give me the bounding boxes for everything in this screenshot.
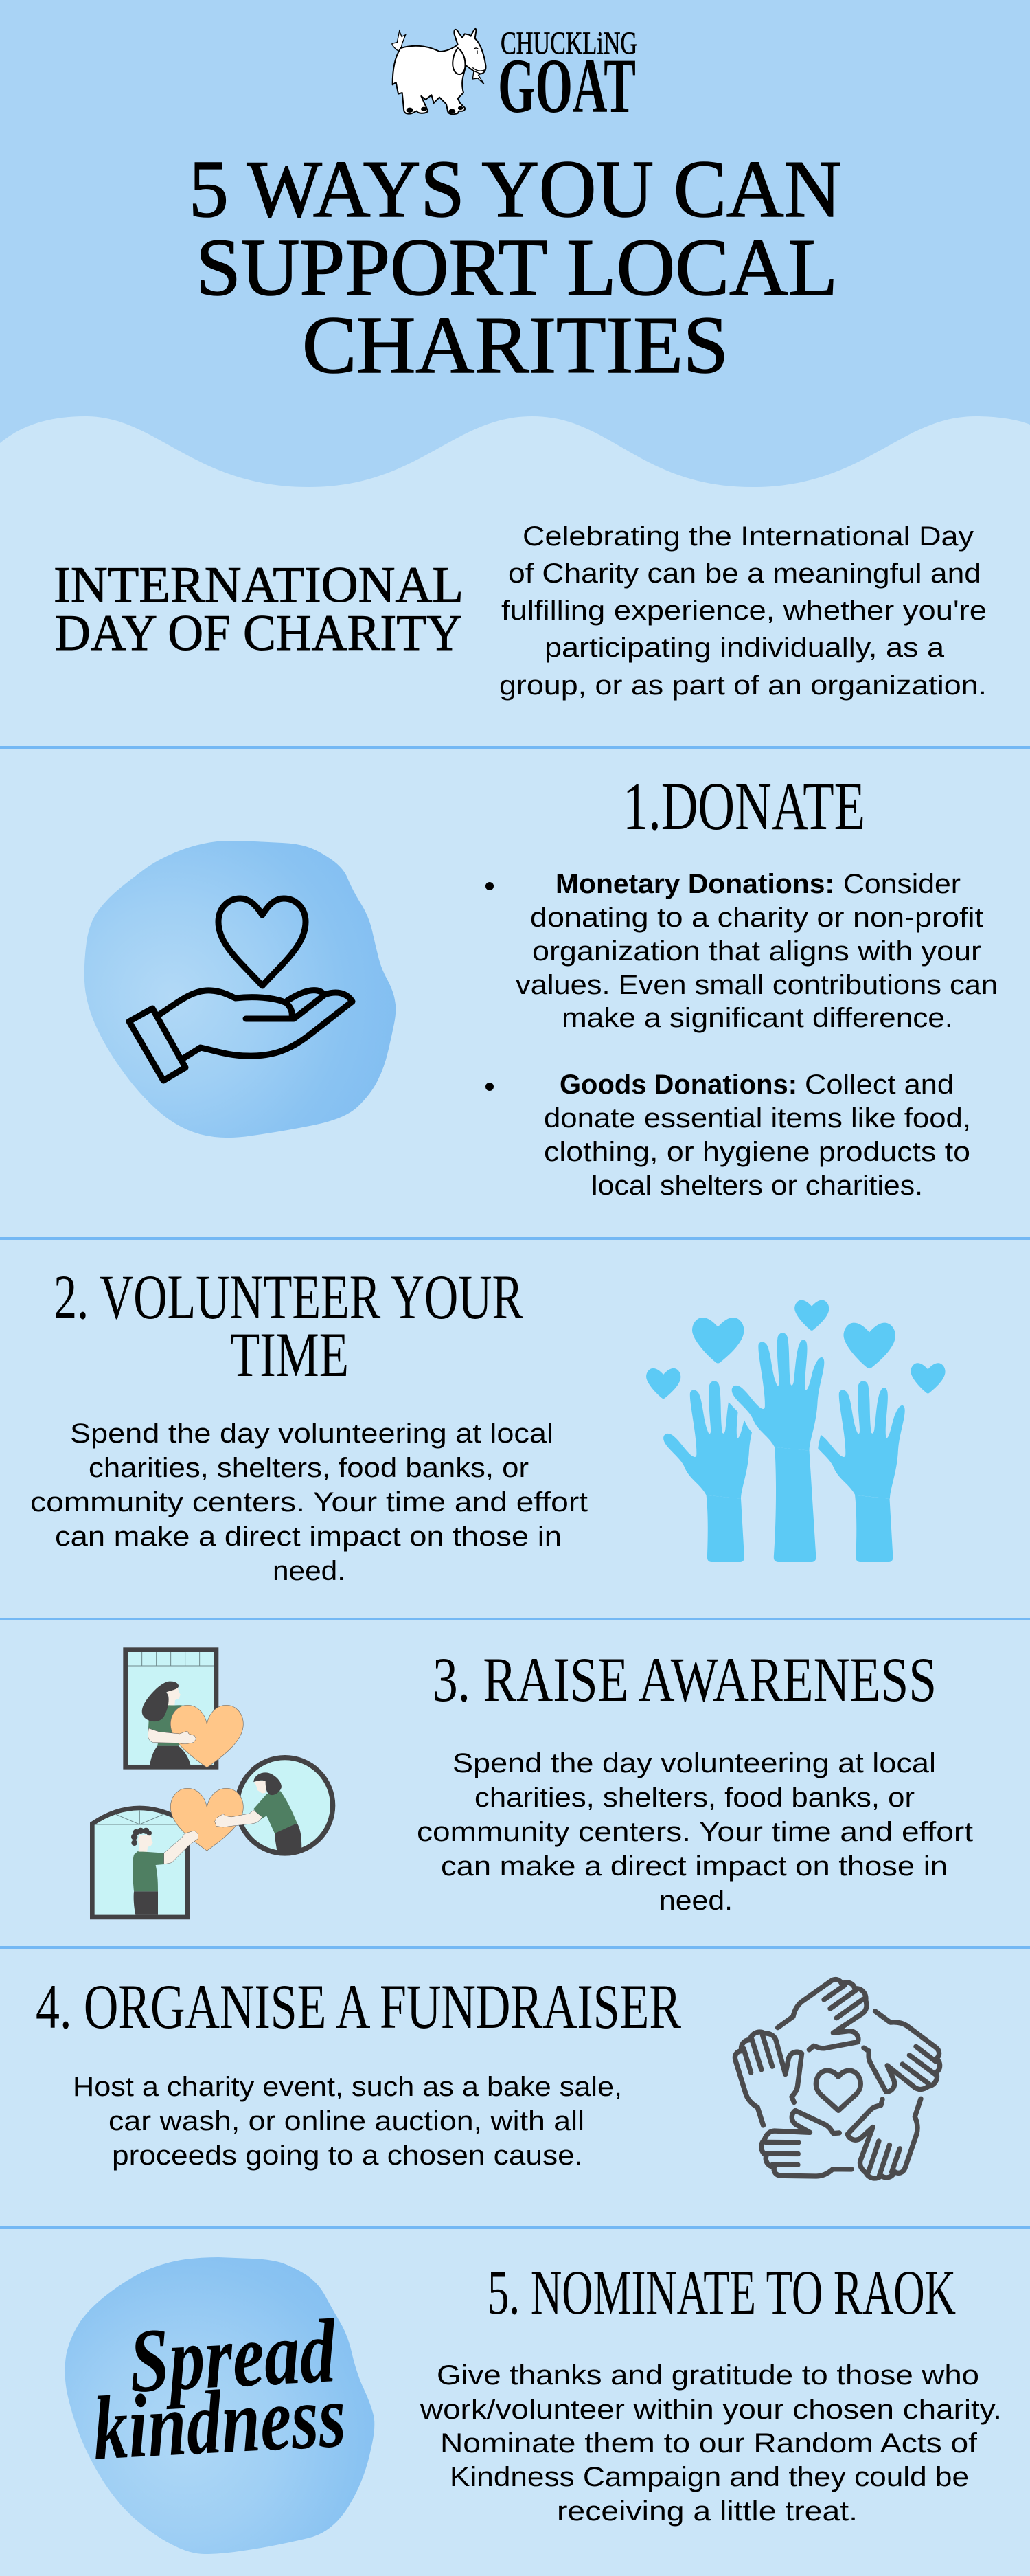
logo wordmark — [498, 25, 637, 129]
icon: circle of hands with heart — [718, 1980, 949, 2208]
goods donations text: clothing, or hygiene products to — [544, 1137, 970, 1167]
arm of woman — [215, 1810, 262, 1827]
body text: Give thanks and gratitude to those who — [437, 2360, 979, 2391]
panel: 4. Organise a fundraiser — [36, 1971, 949, 2208]
icon: raised hands with hearts — [646, 1300, 946, 1562]
body text: community centers. Your time and effort — [30, 1487, 588, 1517]
monetary donations text: donating to a charity or non-profit — [530, 903, 983, 933]
lettering: Spread kindness — [87, 2300, 348, 2479]
intro text: Celebrating the International Day — [523, 521, 974, 552]
logo: Chuckling Goat — [392, 25, 637, 129]
title: 5 WAYS YOU CAN — [189, 144, 841, 234]
monetary donations text: values. Even small contributions can — [516, 970, 998, 1000]
title — [189, 144, 841, 390]
body text: community centers. Your time and effort — [417, 1817, 973, 1847]
arched window with man — [92, 1808, 187, 1917]
intro text: fulfilling experience, whether you're — [501, 596, 987, 626]
lettering: Spread kindness: kindness — [91, 2365, 348, 2479]
panel: 3. Raise awareness — [92, 1645, 973, 1917]
bullet dot — [485, 1083, 494, 1091]
heading: 2. VOLUNTEER YOUR — [54, 1262, 523, 1332]
intro text: group, or as part of an organization. — [499, 670, 987, 701]
panel: 1. Donate — [84, 768, 998, 1201]
logo wordmark: GOAT — [498, 43, 636, 129]
body text: Spend the day volunteering at local — [453, 1748, 936, 1778]
title: CHARITIES — [302, 300, 729, 390]
round window with woman — [237, 1758, 333, 1853]
heading — [54, 557, 464, 662]
intro text: participating individually, as a — [545, 633, 945, 663]
goods donations text: donate essential items like food, — [544, 1103, 971, 1133]
monetary donations text: Consider — [843, 869, 961, 899]
body text — [30, 1419, 588, 1586]
icon: hand holding heart — [129, 899, 352, 1081]
body text — [420, 2360, 1002, 2527]
goods donations text: Collect and — [805, 1070, 954, 1100]
body text: charities, shelters, food banks, or — [474, 1783, 915, 1813]
watercolor blob — [65, 2257, 374, 2554]
heading: 4. ORGANISE A FUNDRAISER — [36, 1971, 681, 2042]
body text: can make a direct impact on those in — [55, 1522, 562, 1552]
body text — [73, 2072, 622, 2171]
logo wordmark: CHUCKLiNG — [501, 25, 637, 61]
body text: Kindness Campaign and they could be — [450, 2462, 969, 2492]
body text: car wash, or online auction, with all — [108, 2106, 584, 2136]
body text: can make a direct impact on those in — [441, 1851, 948, 1882]
heading: DAY OF CHARITY — [55, 605, 462, 662]
monetary donations text — [516, 869, 998, 1033]
watercolor blob — [84, 841, 396, 1138]
heading: INTERNATIONAL — [54, 557, 464, 613]
body text: proceeds going to a chosen cause. — [112, 2140, 583, 2171]
window with woman — [126, 1650, 216, 1767]
monetary donations text: organization that aligns with your — [532, 936, 981, 967]
icon: goat — [392, 29, 485, 114]
bullet dot — [485, 882, 494, 890]
goods donations text: Goods Donations: — [560, 1070, 797, 1100]
panel: 5. Nominate to RAOK — [65, 2257, 1002, 2554]
body text: charities, shelters, food banks, or — [89, 1453, 529, 1483]
title: SUPPORT LOCAL — [196, 222, 838, 313]
heart two — [170, 1788, 243, 1851]
intro text: of Charity can be a meaningful and — [508, 558, 981, 589]
heading — [54, 1262, 523, 1390]
body text: need. — [273, 1556, 345, 1586]
body text: need. — [659, 1886, 733, 1916]
body text — [417, 1748, 973, 1916]
heading: 1.DONATE — [623, 768, 865, 844]
illustration: people sharing hearts through windows — [92, 1650, 333, 1917]
body text: receiving a little treat. — [557, 2496, 858, 2527]
goods donations text: local shelters or charities. — [591, 1171, 923, 1201]
panel: International Day of Charity — [54, 521, 987, 701]
goods donations text — [544, 1070, 971, 1201]
monetary donations text: make a significant difference. — [562, 1003, 953, 1033]
heart one — [170, 1705, 243, 1767]
intro text — [499, 521, 987, 701]
panel: 2. Volunteer your time — [30, 1262, 946, 1586]
arm of man — [164, 1831, 198, 1864]
arm around heart — [148, 1728, 196, 1744]
body text: Nominate them to our Random Acts of — [440, 2428, 978, 2459]
body text: work/volunteer within your chosen charity. — [420, 2395, 1002, 2425]
heading: TIME — [230, 1320, 349, 1390]
monetary donations text: Monetary Donations: — [556, 869, 834, 899]
lettering: Spread kindness: Spread — [127, 2300, 339, 2412]
body text: Spend the day volunteering at local — [70, 1419, 553, 1449]
body text: Host a charity event, such as a bake sale, — [73, 2072, 622, 2102]
